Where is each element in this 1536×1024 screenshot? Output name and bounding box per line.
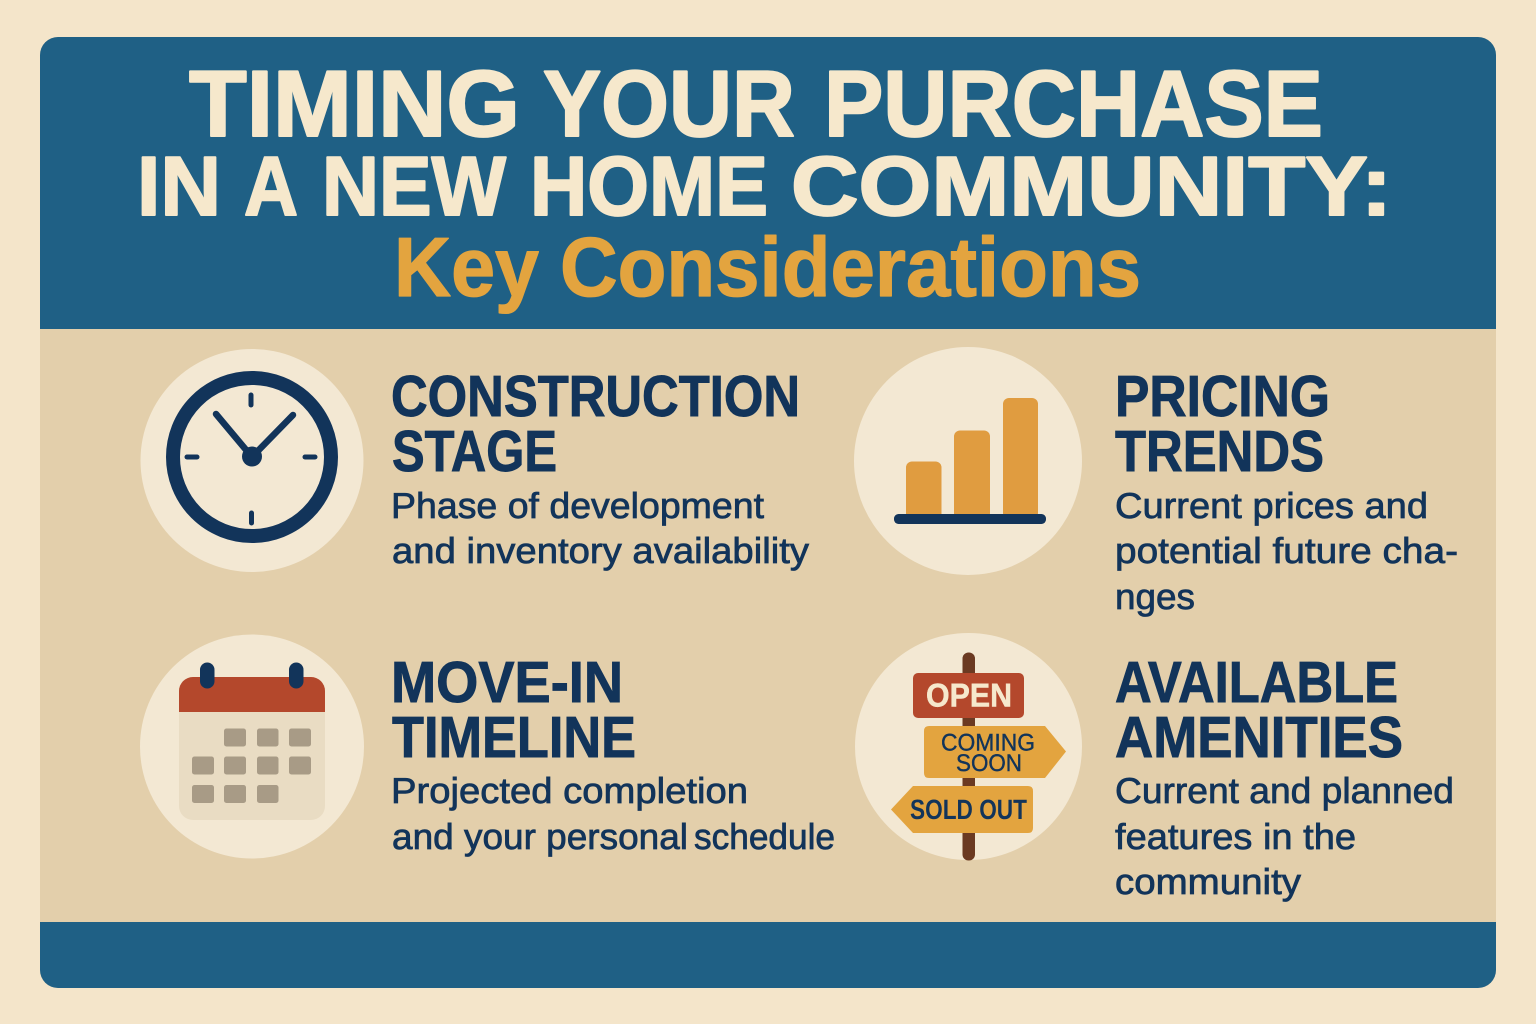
text: construction stage: Phase of development [391,485,764,526]
heading: move-in timeline: MOVE-IN [391,650,623,715]
title line 2: HOME [530,139,768,233]
header band [40,37,1496,329]
text: move-in timeline: Projected completion [391,770,748,811]
text: available amenities: community [1115,861,1301,902]
text: available amenities: Current and planned [1115,770,1454,811]
icon: signpost [855,633,1082,860]
text: available amenities: features in the [1115,816,1356,857]
heading: available amenities: AMENITIES [1115,705,1403,770]
heading: construction stage [391,364,800,484]
text: move-in timeline [391,770,835,857]
icon: signpost: COMING [941,730,1035,756]
title line 1: TIMING [189,51,520,156]
heading: available amenities [1115,650,1403,770]
text: available amenities [1115,770,1454,902]
heading: pricing trends: TRENDS [1115,419,1324,484]
footer band [40,922,1496,988]
title line 2: IN [137,139,221,233]
text: pricing trends: nges [1115,576,1195,617]
text: pricing trends: potential future cha- [1115,530,1458,571]
title line 2: NEW [322,139,507,233]
text: construction stage [391,485,809,571]
title line 1: PURCHASE [824,51,1323,156]
title line 2: A [244,139,298,233]
title [137,51,1392,314]
text: pricing trends: Current prices and [1115,485,1428,526]
title line 1: YOUR [543,51,795,156]
heading: move-in timeline [391,650,636,770]
title line 1 [189,51,1323,156]
heading: pricing trends [1115,364,1330,484]
text: move-in timeline: and your personal [392,816,688,857]
icon: signpost: SOON [956,750,1022,777]
text: pricing trends [1115,485,1458,617]
icon: signpost: SOLD OUT [910,794,1027,825]
icon: bar chart [854,347,1082,575]
heading: move-in timeline: TIMELINE [392,705,636,770]
heading: construction stage: STAGE [392,419,557,484]
text: move-in timeline: schedule [694,816,835,857]
title line 3: Key [394,220,539,314]
icon: calendar [140,634,364,858]
heading: pricing trends: PRICING [1115,364,1330,429]
icon: signpost: OPEN [926,676,1012,714]
icon: clock [140,349,364,572]
title line 2: COMMUNITY: [791,139,1392,233]
text: construction stage: and inventory availability [392,530,809,571]
title line 3: Considerations [560,220,1141,314]
title line 2 [137,139,1392,233]
heading: construction stage: CONSTRUCTION [391,364,800,429]
heading: available amenities: AVAILABLE [1115,650,1398,715]
